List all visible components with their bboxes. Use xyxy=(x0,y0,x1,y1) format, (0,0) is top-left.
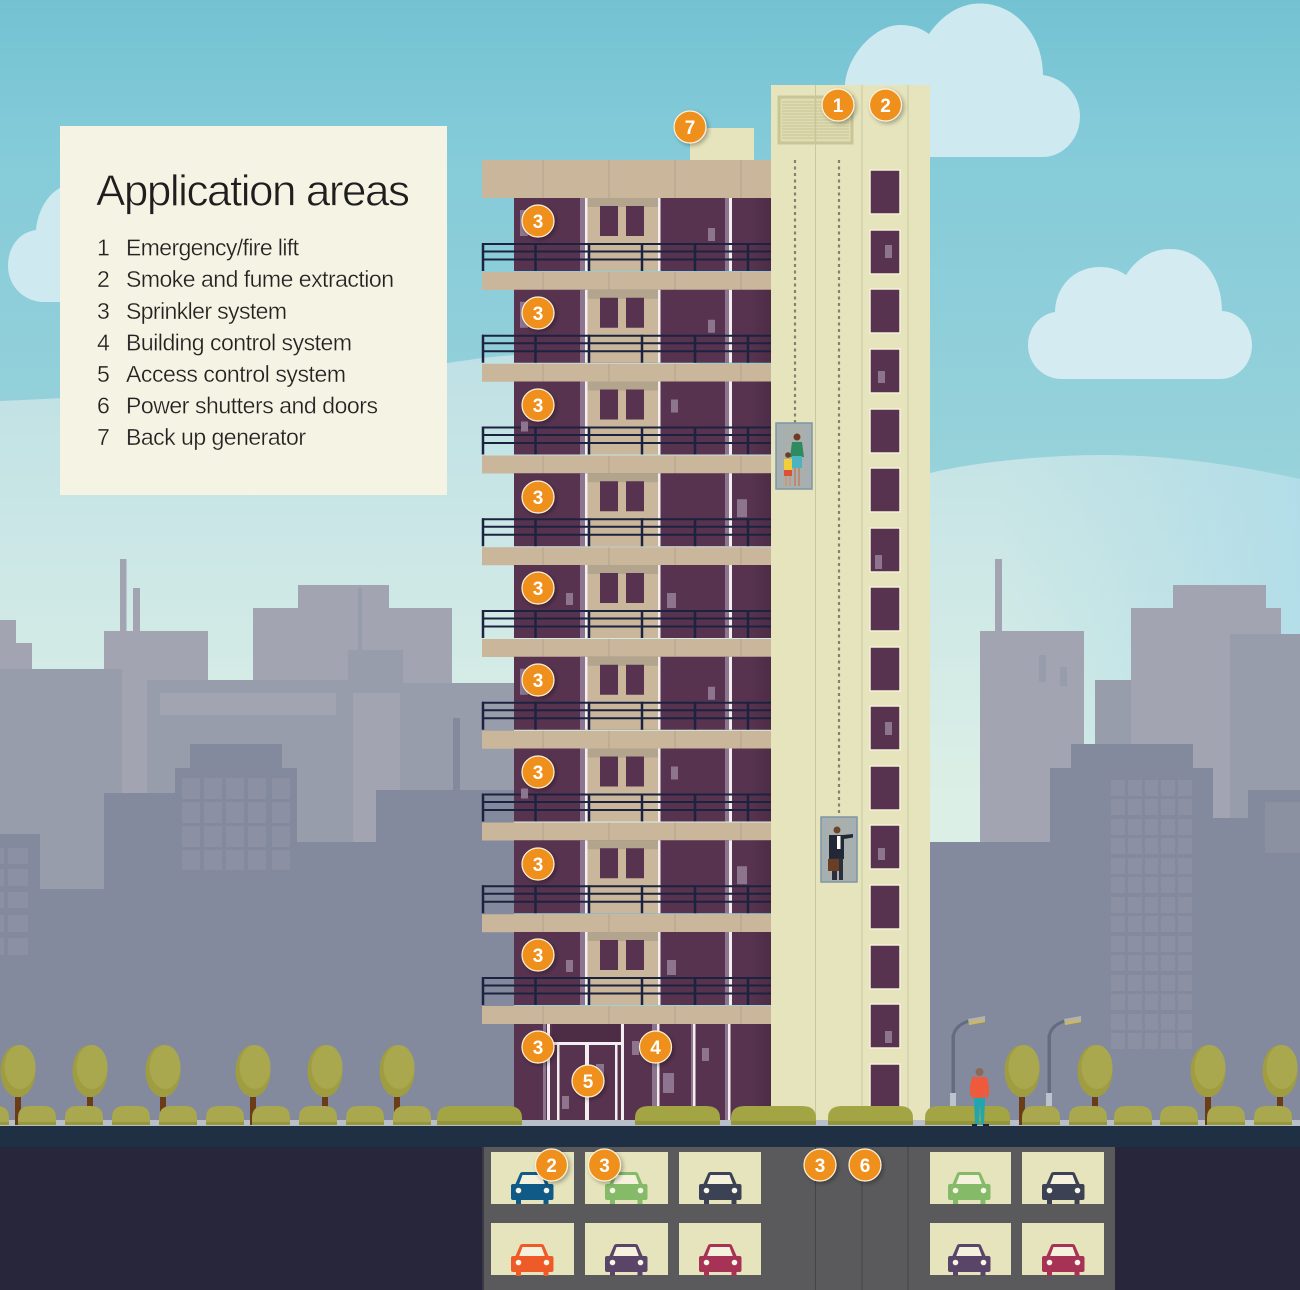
legend item 4: 4 xyxy=(97,330,110,356)
window grid: left building xyxy=(0,778,290,955)
legend item 5: Access control system xyxy=(126,361,346,387)
marker 3 ground floor: 3 xyxy=(533,1038,543,1059)
underground xyxy=(0,1147,1300,1290)
window grid: right building xyxy=(1111,780,1192,1049)
floor 8 xyxy=(482,840,771,932)
lift car with mother and child xyxy=(776,423,812,489)
floor 1 xyxy=(482,198,771,290)
car park xyxy=(482,1147,1115,1290)
marker 3 floor 4: 3 xyxy=(533,488,543,509)
marker 3 shaft xyxy=(804,1149,836,1181)
service tower xyxy=(771,85,930,1126)
rooftop generator housing xyxy=(690,128,754,161)
marker 3 floor 3 xyxy=(522,389,554,421)
legend item 2: Smoke and fume extraction xyxy=(126,266,394,292)
floor 5 xyxy=(482,565,771,657)
marker 3 floor 5 xyxy=(522,572,554,604)
heading: Application areas xyxy=(96,166,410,216)
floor 3 xyxy=(482,382,771,474)
marker 4: 4 xyxy=(650,1038,661,1059)
roof slab xyxy=(482,160,771,198)
entrance doors xyxy=(547,1024,730,1120)
residential floors xyxy=(482,198,771,1024)
marker 3 floor 7: 3 xyxy=(533,763,543,784)
marker 2 car park: 2 xyxy=(546,1156,557,1177)
marker 1: 1 xyxy=(833,96,844,117)
marker 3 car park: 3 xyxy=(599,1156,610,1177)
lift car with businessman xyxy=(821,817,857,882)
floor 2 xyxy=(482,290,771,382)
legend item 1: Emergency/fire lift xyxy=(126,234,300,260)
marker 3 floor 2: 3 xyxy=(533,304,543,325)
marker 3 ground floor xyxy=(522,1031,554,1063)
lift cable: right shaft xyxy=(838,160,840,816)
marker 3 floor 5: 3 xyxy=(533,579,543,600)
tower window reflections xyxy=(875,245,892,1043)
cloud: behind tower xyxy=(845,4,1080,157)
floor 6 xyxy=(482,657,771,749)
hedges xyxy=(0,1106,1292,1125)
cloud: right xyxy=(1028,249,1252,379)
marker 3 floor 2 xyxy=(522,297,554,329)
legend item 1: 1 xyxy=(97,234,110,260)
sidewalk xyxy=(0,1120,1300,1126)
floor 7 xyxy=(482,748,771,840)
marker 3 floor 8 xyxy=(522,848,554,880)
marker 3 floor 6 xyxy=(522,664,554,696)
marker 3 floor 8: 3 xyxy=(533,855,543,876)
legend item 6: 6 xyxy=(97,392,110,418)
marker 3 floor 6: 3 xyxy=(533,671,543,692)
street trees xyxy=(0,1045,1298,1125)
marker 3 floor 1: 3 xyxy=(533,212,543,233)
pedestrian xyxy=(970,1068,989,1126)
marker 2 xyxy=(870,89,902,121)
legend item 3: 3 xyxy=(97,298,110,324)
panel: application areas legend xyxy=(60,126,447,495)
city skyline: middle layer xyxy=(0,588,1300,889)
lift cable: left shaft xyxy=(794,160,796,423)
marker 3 shaft: 3 xyxy=(815,1156,825,1177)
marker 3 floor 7 xyxy=(522,756,554,788)
city skyline: light strips xyxy=(122,669,400,843)
legend item 7: 7 xyxy=(97,424,110,450)
city skyline: back layer xyxy=(0,559,1300,846)
marker 1 xyxy=(822,89,854,121)
floor 4 xyxy=(482,473,771,565)
marker 5 xyxy=(572,1065,604,1097)
marker 3 floor 1 xyxy=(522,205,554,237)
marker 3 floor 3: 3 xyxy=(533,396,543,417)
pale hills xyxy=(0,353,1300,880)
city skyline: front layer xyxy=(0,718,1300,1134)
floor 9 xyxy=(482,932,771,1024)
tower windows xyxy=(870,170,900,1114)
road xyxy=(0,1126,1300,1148)
legend item 6: Power shutters and doors xyxy=(126,392,378,418)
marker 6: 6 xyxy=(860,1156,870,1177)
marker 3 floor 4 xyxy=(522,481,554,513)
legend item 7: Back up generator xyxy=(126,424,306,450)
ground floor lobby xyxy=(514,1024,771,1126)
cloud: left xyxy=(8,187,62,302)
marker 7 xyxy=(674,111,706,143)
marker 3 car park xyxy=(588,1149,620,1181)
legend item 5: 5 xyxy=(97,361,110,387)
marker 3 floor 9: 3 xyxy=(533,946,543,967)
marker 5: 5 xyxy=(583,1072,594,1093)
marker 2: 2 xyxy=(880,96,891,117)
marker 4 xyxy=(640,1031,672,1063)
legend item 2: 2 xyxy=(97,266,110,292)
marker 6 xyxy=(849,1149,881,1181)
ventilation louvre xyxy=(779,97,852,143)
street lamps xyxy=(950,1016,1081,1106)
cars xyxy=(511,1172,1084,1276)
marker 2 car park xyxy=(536,1149,568,1181)
marker 3 floor 9 xyxy=(522,939,554,971)
legend item 4: Building control system xyxy=(126,330,352,356)
marker 7: 7 xyxy=(685,118,695,139)
legend item 3: Sprinkler system xyxy=(126,298,287,324)
